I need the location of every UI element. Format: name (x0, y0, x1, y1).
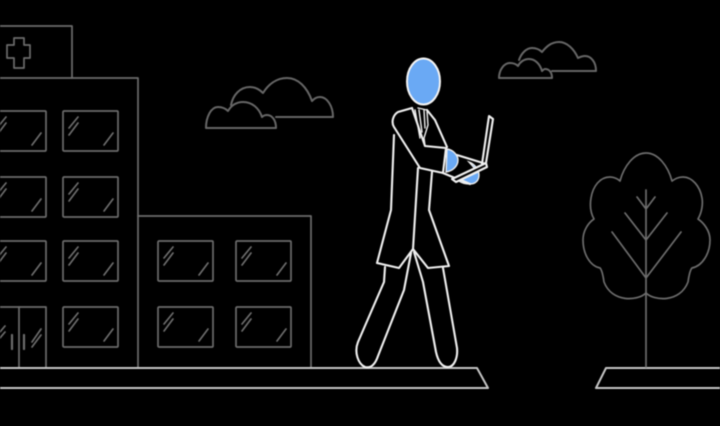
ground slab: left (0, 368, 488, 388)
hospital: main building (0, 26, 138, 367)
legs (356, 252, 457, 367)
tree trunk and branches (612, 190, 681, 367)
coat (377, 108, 483, 268)
hospital entrance doors (0, 307, 46, 367)
hospital: low wing (138, 216, 311, 367)
sleeve and shoulders (393, 108, 446, 173)
windows: right column (63, 111, 118, 347)
tree canopy (583, 153, 710, 299)
cloud: right pair (499, 42, 596, 78)
forearm (443, 155, 483, 184)
low wing windows (158, 241, 291, 347)
windows: left column (0, 111, 46, 281)
laptop (452, 116, 493, 182)
hospital sign with medical cross (0, 26, 72, 78)
head (407, 58, 440, 104)
hand: far (459, 162, 479, 184)
cloud: left pair (206, 78, 333, 128)
tree (583, 153, 710, 367)
doctor figure (356, 58, 493, 367)
shirt and tie (415, 108, 428, 146)
hand: near (446, 149, 458, 172)
ground slab: right (596, 368, 720, 388)
